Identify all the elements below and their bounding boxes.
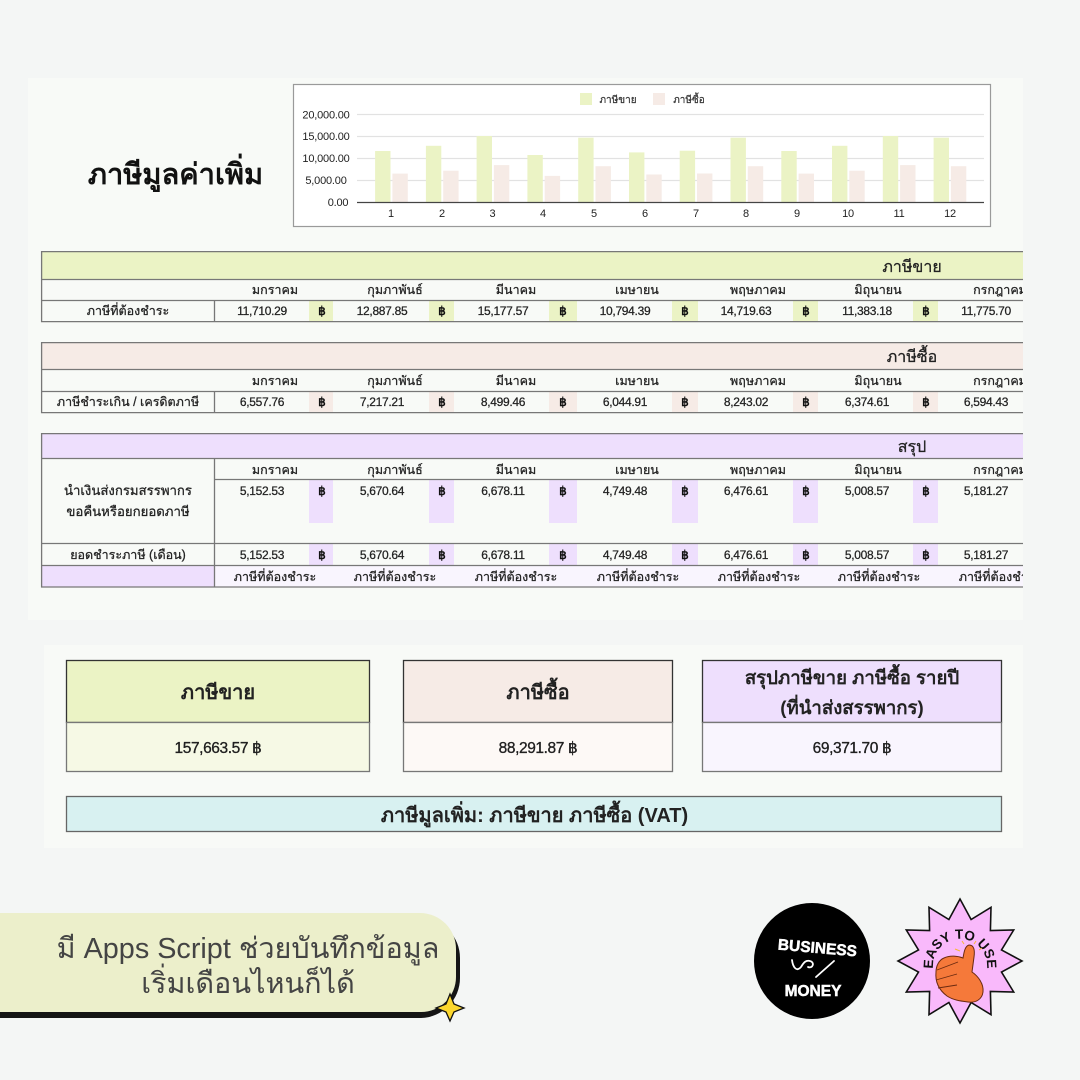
table: summary [42, 434, 1041, 587]
month row: กุมภาพันธ์ [367, 374, 423, 389]
row: monthly tax balance: 5,181.27 [964, 548, 1009, 562]
month row: กุมภาพันธ์ [367, 463, 423, 478]
row: status: ภาษีที่ต้องชำระ [234, 568, 316, 584]
icon: thumb rays [955, 941, 982, 951]
row: overpaid tax / tax credit: ฿ [559, 395, 567, 409]
month row: เมษายน [615, 374, 659, 388]
logo: Business Money: MONEY [785, 983, 842, 1000]
heading: purchase tax: ภาษีซื้อ [887, 345, 937, 366]
row: remit to revenue department: ฿ [922, 484, 930, 498]
card: yearly summary total: (ที่นำส่งสรรพากร) [780, 694, 924, 718]
month row [252, 374, 1027, 389]
title: ภาษีมูลค่าเพิ่ม [88, 153, 263, 192]
logo: Business Money: BUSINESS [777, 937, 858, 960]
row: monthly tax balance: ฿ [802, 548, 810, 562]
card: purchase tax total: ภาษีซื้อ [506, 677, 570, 704]
month row: มกราคม [252, 374, 298, 388]
month row: กุมภาพันธ์ [367, 283, 423, 298]
row: monthly tax balance: 4,749.48 [603, 548, 648, 562]
x axis labels: 1 [388, 208, 394, 220]
month row: กรกฎาคม [973, 374, 1027, 388]
x axis labels: 9 [794, 208, 800, 220]
row: remit to revenue department: ฿ [318, 484, 326, 498]
row: monthly tax balance: ฿ [559, 548, 567, 562]
row: status: ภาษีที่ต้องชำระ [597, 568, 679, 584]
row: tax payable: ฿ [922, 304, 930, 318]
logo: Business Money [754, 903, 870, 1019]
row: remit to revenue department: 5,670.64 [360, 484, 405, 498]
row: status [234, 568, 1023, 582]
row: tax payable: 11,710.29 [237, 304, 288, 318]
month row: พฤษภาคม [730, 283, 786, 297]
panel: yearly summary [44, 645, 1023, 848]
month row: เมษายน [615, 283, 659, 297]
row: remit to revenue department: ฿ [438, 484, 446, 498]
callout: Apps Script: เริ่มเดือนไหนก็ได้ [141, 963, 355, 1000]
row: monthly tax balance: 6,678.11 [481, 548, 525, 562]
row: monthly tax balance: 5,008.57 [845, 548, 890, 562]
row: remit to revenue department: 6,476.61 [724, 484, 769, 498]
chart legend: ภาษีซื้อ [673, 92, 705, 106]
x axis labels: 4 [540, 208, 546, 220]
row: remit to revenue department: ขอคืนหรือยกยอดภาษี [66, 504, 190, 519]
row: tax payable: ฿ [802, 304, 810, 318]
y axis labels [302, 110, 350, 209]
row: remit to revenue department: 5,152.53 [240, 484, 285, 498]
heading: sales tax: ภาษีขาย [882, 258, 942, 276]
x axis labels: 8 [743, 208, 749, 220]
card: yearly summary total [702, 660, 1002, 772]
month row: มกราคม [252, 463, 298, 477]
row: tax payable: 10,794.39 [600, 304, 651, 318]
card: sales tax total [66, 660, 370, 772]
row: tax payable: 15,177.57 [478, 304, 529, 318]
row: overpaid tax / tax credit: 6,374.61 [845, 395, 890, 409]
row: remit to revenue department [64, 483, 1009, 519]
row: tax payable: 11,383.18 [842, 304, 893, 318]
y axis labels: 10,000.00 [302, 153, 350, 165]
row: overpaid tax / tax credit: 8,499.46 [481, 395, 526, 409]
card: yearly summary total: สรุปภาษีขาย ภาษีซื้อ รายปี [745, 664, 959, 690]
row: tax payable: ฿ [318, 304, 326, 318]
badge: easy to use [896, 898, 1024, 1024]
row: overpaid tax / tax credit: ฿ [802, 395, 810, 409]
row: monthly tax balance: 5,152.53 [240, 548, 285, 562]
x axis labels: 6 [642, 208, 648, 220]
row: monthly tax balance: 6,476.61 [724, 548, 769, 562]
row: overpaid tax / tax credit: ฿ [681, 395, 689, 409]
card: purchase tax total: 88,291.87 ฿ [499, 740, 578, 757]
banner: VAT label: ภาษีมูลเพิ่ม: ภาษีขาย ภาษีซื้อ (VAT) [381, 800, 688, 829]
card: purchase tax total [404, 660, 672, 772]
month row: เมษายน [615, 463, 659, 477]
purchase bars [392, 165, 966, 202]
month row [252, 283, 1027, 298]
month row: กรกฎาคม [973, 283, 1027, 297]
y axis labels: 20,000.00 [302, 110, 350, 122]
row: remit to revenue department: 4,749.48 [603, 484, 648, 498]
row: overpaid tax / tax credit [57, 395, 1009, 409]
card: sales tax total: 157,663.57 ฿ [175, 740, 262, 757]
x axis labels: 3 [490, 208, 496, 220]
table: sales tax [42, 252, 1032, 322]
row: tax payable: ฿ [559, 304, 567, 318]
row: tax payable: 14,719.63 [721, 304, 772, 318]
row: remit to revenue department: ฿ [802, 484, 810, 498]
x axis labels: 10 [842, 208, 854, 220]
row: tax payable: 11,775.70 [961, 304, 1012, 318]
row: tax payable [87, 302, 1012, 318]
month row: มิถุนายน [854, 374, 902, 389]
month row: พฤษภาคม [730, 463, 786, 477]
row: remit to revenue department: ฿ [681, 484, 689, 498]
row: tax payable: ฿ [438, 304, 446, 318]
y axis labels: 0.00 [328, 197, 348, 209]
y axis labels: 5,000.00 [305, 175, 347, 187]
row: tax payable: ฿ [681, 304, 689, 318]
row: remit to revenue department: 5,181.27 [964, 484, 1009, 498]
callout: Apps Script: มี Apps Script ช่วยบันทึกข้อมูล [57, 933, 439, 966]
row: monthly tax balance: ฿ [922, 548, 930, 562]
month row: มีนาคม [496, 283, 536, 297]
x axis labels: 11 [893, 208, 905, 220]
row: monthly tax balance: ฿ [318, 548, 326, 562]
row: status: ภาษีที่ต้องชำระ [959, 568, 1041, 584]
x axis labels: 7 [693, 208, 699, 220]
x axis labels: 12 [944, 208, 956, 220]
chart legend: ภาษีขาย [599, 94, 637, 106]
row: overpaid tax / tax credit: 8,243.02 [724, 395, 769, 409]
banner: VAT label [66, 796, 1002, 832]
month row: มกราคม [252, 283, 298, 297]
row: status: ภาษีที่ต้องชำระ [475, 568, 557, 584]
month row: มีนาคม [496, 463, 536, 477]
chart legend [580, 92, 705, 106]
row: overpaid tax / tax credit: ฿ [318, 395, 326, 409]
row: status: ภาษีที่ต้องชำระ [838, 568, 920, 584]
row: tax payable: ภาษีที่ต้องชำระ [87, 302, 169, 318]
sales bars [375, 136, 949, 202]
bar chart [294, 84, 990, 226]
row: overpaid tax / tax credit: 6,594.43 [964, 395, 1009, 409]
row: tax payable: 12,887.85 [357, 304, 408, 318]
row: monthly tax balance: ฿ [681, 548, 689, 562]
row: overpaid tax / tax credit: 6,557.76 [240, 395, 285, 409]
row: status: ภาษีที่ต้องชำระ [354, 568, 436, 584]
row: monthly tax balance: 5,670.64 [360, 548, 405, 562]
badge: easy to use: EASY TO USE [924, 929, 996, 968]
month row: กรกฎาคม [973, 463, 1027, 477]
row: remit to revenue department: 5,008.57 [845, 484, 890, 498]
row: remit to revenue department: ฿ [559, 484, 567, 498]
row: overpaid tax / tax credit: ฿ [922, 395, 930, 409]
month row: มิถุนายน [854, 283, 902, 298]
card: yearly summary total: 69,371.70 ฿ [813, 740, 892, 757]
row: monthly tax balance: ยอดชำระภาษี (เดือน) [70, 548, 186, 562]
icon: sparkle [436, 994, 464, 1021]
x axis labels: 2 [439, 208, 445, 220]
row: overpaid tax / tax credit: ภาษีชำระเกิน / เครดิตภาษี [57, 395, 199, 409]
row: monthly tax balance: ฿ [438, 548, 446, 562]
row: monthly tax balance [70, 548, 1009, 562]
row: remit to revenue department: 6,678.11 [481, 484, 525, 498]
y axis labels: 15,000.00 [302, 131, 350, 143]
table: purchase tax [42, 343, 1032, 413]
row: overpaid tax / tax credit: 6,044.91 [603, 395, 648, 409]
month row: มีนาคม [496, 374, 536, 388]
month row: พฤษภาคม [730, 374, 786, 388]
row: status: ภาษีที่ต้องชำระ [718, 568, 800, 584]
icon: thumbs up [936, 945, 983, 1002]
row: remit to revenue department: นำเงินส่งกรมสรรพากร [64, 483, 192, 498]
callout: Apps Script [0, 913, 464, 1021]
month row: มิถุนายน [854, 463, 902, 478]
heading: summary: สรุป [898, 439, 926, 457]
card: sales tax total: ภาษีขาย [181, 681, 255, 704]
row: overpaid tax / tax credit: 7,217.21 [360, 395, 405, 409]
x axis labels: 5 [591, 208, 597, 220]
month row [252, 463, 1027, 478]
row: overpaid tax / tax credit: ฿ [438, 395, 446, 409]
x axis labels [388, 208, 956, 220]
panel: spreadsheet [28, 78, 1023, 620]
